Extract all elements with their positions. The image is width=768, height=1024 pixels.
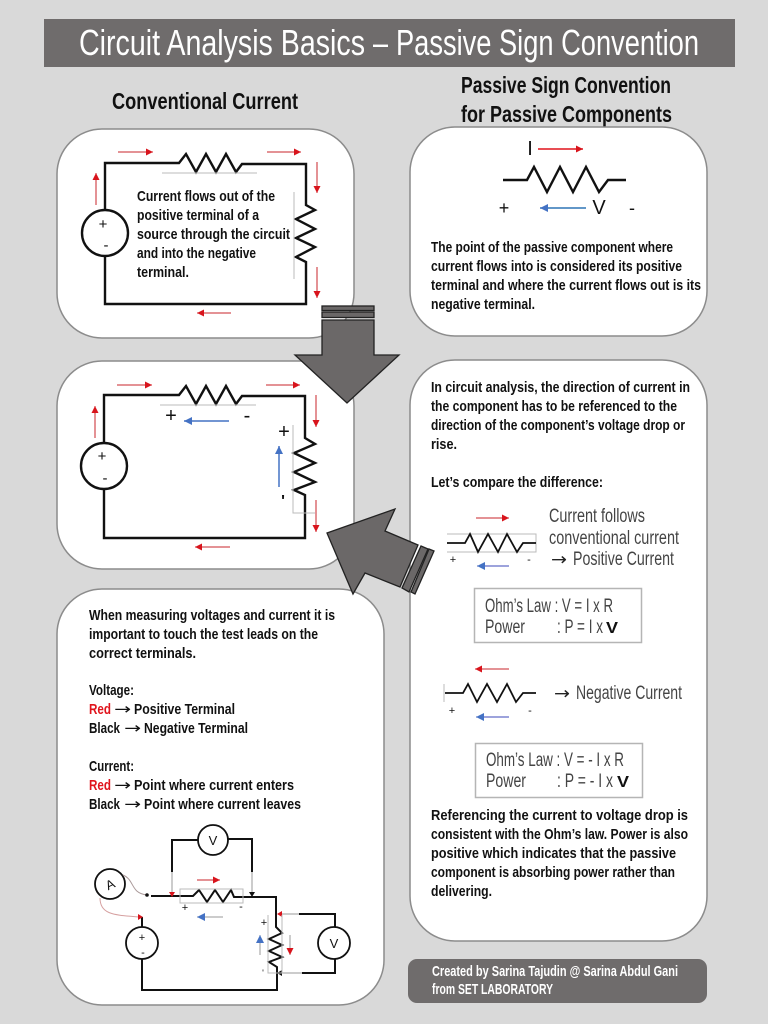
text: current flow description: source through the circuit [137,226,290,243]
circuit diagram with polarity marks: ' [281,493,285,510]
circuit with voltmeters and ammeter: + [139,932,145,944]
text: current flow description: terminal. [137,264,189,281]
diagram: negative current resistor [444,669,536,717]
circuit with voltmeters and ammeter: + [182,902,188,914]
formula box: negative current: Ohm’s Law : V = - I x R [486,750,624,771]
panel: circuit with voltage polarity [57,361,354,569]
panel: passive sign convention [410,127,707,336]
text: current lead rules: Black [89,796,121,813]
circuit diagram with source and resistors: - [104,237,108,254]
circuit with voltmeters and ammeter: + [261,917,267,929]
circuit diagram with source and resistors [82,152,317,313]
formula box: positive current: V [606,620,618,637]
text: introduction: In circuit analysis, the direction of current in [431,379,690,396]
formula box: positive current: Ohm’s Law : V = I x R [485,596,613,617]
heading: passive sign convention: Passive Sign Convention [461,72,671,98]
text: conclusion: Referencing the current to voltage drop is [431,807,688,824]
heading: conventional current: Conventional Current [112,88,298,114]
text: conclusion: consistent with the Ohm’s law. Power is also [431,826,688,843]
text: positive current label [549,506,680,570]
panel: conventional current circuit [57,129,354,338]
text: passive component description: negative terminal. [431,296,535,313]
text: current flow description [137,188,290,281]
text: passive component description [431,239,701,313]
resistor diagram with current and voltage [499,138,635,219]
formula box: positive current [474,588,642,642]
circuit diagram with polarity marks: - [244,405,250,427]
circuit diagram with polarity marks: + [165,405,177,427]
text: measuring advice: correct terminals. [89,645,196,662]
text: voltage lead rules: → [114,700,131,718]
diagram: negative current resistor: - [528,705,532,717]
resistor diagram with current and voltage: + [499,198,509,218]
text: voltage lead rules: Negative Terminal [144,720,248,737]
text: passive component description: The point of the passive component where [431,239,673,256]
text: conclusion: delivering. [431,883,492,900]
text: introduction: rise. [431,436,457,453]
text: passive component description: terminal and where the current flows out is its [431,277,701,294]
resistor diagram with current and voltage: - [629,198,635,218]
circuit with voltmeters and ammeter: ' [262,968,264,978]
text: positive current label: → [551,550,567,570]
circuit diagram with polarity marks [81,385,316,547]
heading: passive sign convention: for Passive Components [461,101,672,127]
text: current flow description: positive terminal of a [137,207,260,224]
circuit with voltmeters and ammeter: V [209,833,218,848]
text: negative current label: → [554,684,570,704]
footer credit [408,959,707,1003]
title banner: Circuit Analysis Basics [79,22,365,63]
footer credit: Created by Sarina Tajudin @ Sarina Abdul Gani [432,963,678,980]
text: introduction [431,379,690,491]
heading: passive sign convention [461,72,672,127]
text: measuring advice: important to touch the test leads on the [89,626,318,643]
diagram: positive current resistor [447,518,536,566]
panel: compare current direction [410,360,707,941]
panel: measuring voltages and current [57,589,384,1005]
text: current lead rules [89,758,301,813]
formula box: negative current: V [617,774,629,791]
text: introduction: direction of the component’s voltage drop or [431,417,685,434]
diagram: positive current resistor: - [527,554,531,566]
circuit diagram with polarity marks: + [98,448,107,465]
resistor diagram with current and voltage: V [592,197,606,219]
text: positive current label: Positive Current [573,549,675,570]
circuit with voltmeters and ammeter: V [330,936,339,951]
text: measuring advice [89,607,335,662]
text: current lead rules: Point where current leaves [144,796,301,813]
diagram: negative current resistor: + [449,705,455,717]
resistor diagram with current and voltage: I [527,138,533,160]
arrow: down from first to second circuit [295,306,399,403]
text: current lead rules: → [124,795,141,813]
text: current lead rules: Current: [89,758,134,775]
arrow: from comparison panel to second circuit [327,509,434,594]
footer credit: from SET LABORATORY [432,981,553,998]
text: conclusion: component is absorbing power rather than [431,864,675,881]
text: voltage lead rules [89,682,248,737]
text: conclusion: positive which indicates that the passive [431,845,676,862]
text: conclusion [431,807,688,900]
text: voltage lead rules: → [124,719,141,737]
circuit with voltmeters and ammeter: - [141,947,145,959]
circuit with voltmeters and ammeter: A [103,876,118,893]
circuit diagram with polarity marks: - [102,470,108,487]
text: negative current label [554,683,683,704]
text: current lead rules: Red [89,777,111,794]
circuit with voltmeters and ammeter [95,825,350,990]
text: positive current label: Current follows [549,506,645,527]
formula box: positive current: : P = I x [557,617,603,638]
text: introduction: Let’s compare the difference: [431,474,603,491]
text: current lead rules: Point where current enters [134,777,294,794]
circuit diagram with source and resistors: + [99,216,108,233]
formula box: positive current: Power [485,617,525,638]
text: introduction: the component has to be referenced to the [431,398,677,415]
formula box: negative current [476,744,642,798]
text: current flow description: and into the negative [137,245,256,262]
text: voltage lead rules: Black [89,720,121,737]
text: current lead rules: → [114,776,131,794]
circuit with voltmeters and ammeter: - [239,901,243,913]
diagram: positive current resistor: + [450,554,456,566]
text: negative current label: Negative Current [576,683,683,704]
text: voltage lead rules: Positive Terminal [134,701,235,718]
text: current flow description: Current flows out of the [137,188,275,205]
text: measuring advice: When measuring voltages and current it is [89,607,335,624]
title banner [44,19,735,67]
text: voltage lead rules: Voltage: [89,682,134,699]
formula box: negative current: Power [486,771,526,792]
text: passive component description: current flows into is considered its positive [431,258,682,275]
title banner: – [373,22,388,63]
text: voltage lead rules: Red [89,701,111,718]
formula box: negative current: : P = - I x [557,771,613,792]
circuit diagram with polarity marks: + [278,421,290,443]
text: positive current label: conventional current [549,528,680,549]
